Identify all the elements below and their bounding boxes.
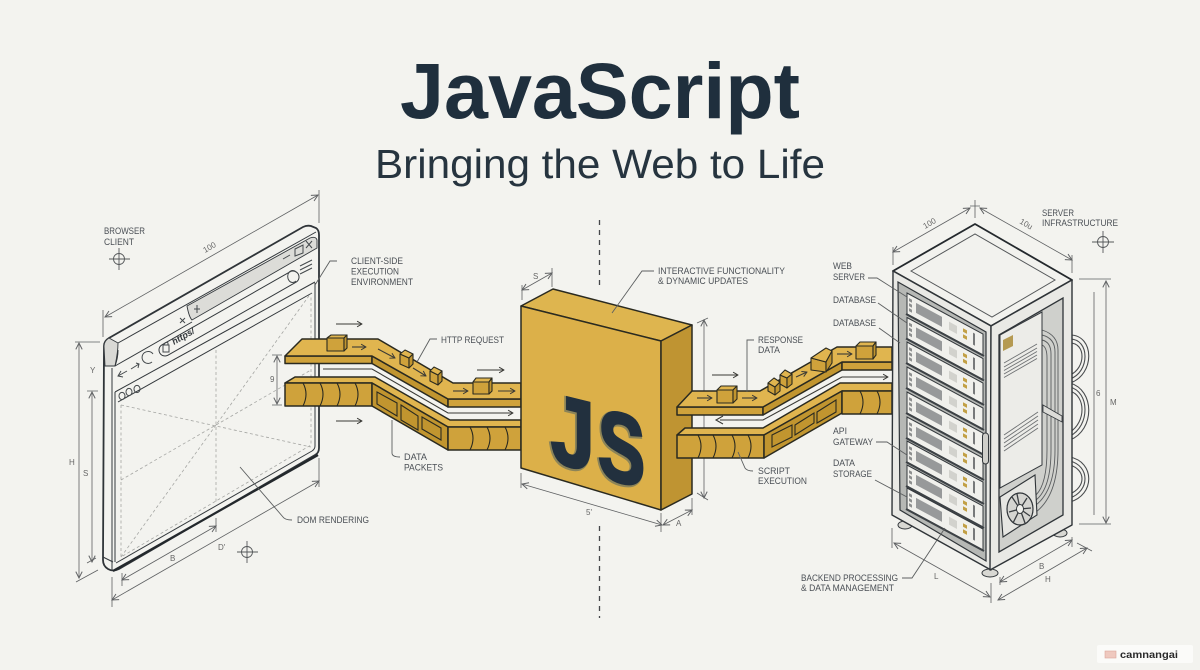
rack dimensions: B [1039,562,1044,571]
icon: crosshair top left [109,248,130,270]
label: backend processing [801,528,945,593]
panel: js cube [521,268,708,532]
label: browser client: BROWSER [104,226,145,236]
label: data storage [833,458,907,497]
label: http request: HTTP REQUEST [441,335,504,345]
js logo: S [598,389,645,509]
label: script execution [738,452,807,486]
cube dimensions: 5' [586,508,592,517]
label: backend processing: BACKEND PROCESSING [801,573,898,583]
label: interactive functionality: INTERACTIVE FUNCTIONALITY [658,266,785,276]
label: web server [833,261,907,297]
browser dimensions [69,190,319,607]
panel: server rack [892,200,1117,603]
label: data packets [392,420,443,472]
response arrow between tracks [323,369,513,413]
rack dimensions: 10u [1018,217,1034,231]
panel: browser client [69,190,319,607]
label: web server: WEB [833,261,852,271]
rack dimensions: 6 [1096,389,1101,398]
watermark badge: camnangai [1120,649,1178,661]
label: browser client [104,226,145,247]
label: server infrastructure [1042,208,1118,228]
cube dimensions: A [676,519,682,528]
label: api gateway [833,426,907,455]
door handle [982,433,988,464]
power supply fan [1000,475,1037,537]
panel: left data pipeline [270,324,521,450]
label: data storage: STORAGE [833,469,872,479]
lower packet track [285,377,521,450]
label: web server: SERVER [833,272,865,282]
browser dimensions: H [69,458,75,467]
rack dimensions: H [1045,575,1051,584]
label: client-side execution: EXECUTION [351,266,399,276]
rack dimensions: 100 [922,216,938,231]
label: database two: DATABASE [833,318,876,328]
url bar [165,277,293,350]
label: database one [833,295,907,323]
data packets [327,335,492,394]
server units [906,293,984,551]
external cable loops [1070,335,1089,502]
label: client-side execution: CLIENT-SIDE [351,256,403,266]
label: database two [833,318,900,343]
rack left face [892,271,991,570]
label: data packets: DATA [404,452,427,462]
cube top face [521,289,692,341]
label: api gateway: GATEWAY [833,437,873,447]
label: data packets: PACKETS [404,462,443,472]
label: database one: DATABASE [833,295,876,305]
label: client-side execution [315,256,413,287]
cube front face [521,306,661,510]
cube dimensions: S [533,272,538,281]
rack interior [999,298,1063,552]
upper request track [285,339,521,407]
label: backend processing: & DATA MANAGEMENT [801,583,894,593]
rack dimensions: L [934,572,939,581]
label: script execution: EXECUTION [758,476,807,486]
browser tab strip [187,237,317,320]
browser dimensions: D' [218,543,226,552]
flow arrows [336,324,515,421]
frame corner [104,338,118,366]
browser toolbar icons [118,241,312,400]
url text: https/ [170,325,198,347]
door panel [1000,312,1042,488]
track height dimension [270,355,282,405]
cube dimensions [521,268,708,532]
subtitle: Bringing the Web to Life [375,141,825,187]
rack right face [990,280,1072,570]
browser dimensions: B [170,554,175,563]
label: response data: DATA [758,345,780,355]
lower script track [677,383,892,458]
browser dimensions: Y [90,366,96,375]
track height dimension: 9 [270,375,275,384]
label: http request [417,335,504,362]
title: JavaScript [400,46,800,135]
browser window frame [103,226,319,570]
label: script execution: SCRIPT [758,466,790,476]
label: response data: RESPONSE [758,335,803,345]
rack dimensions [892,200,1117,603]
upper response track [677,347,892,415]
script arrow between tracks [716,377,888,424]
browser dimensions: 100 [202,240,218,255]
label: browser client: CLIENT [104,237,134,247]
label: server infrastructure: INFRASTRUCTURE [1042,218,1118,228]
label: interactive functionality [612,266,785,313]
label: server infrastructure: SERVER [1042,208,1074,218]
label: api gateway: API [833,426,847,436]
label: data storage: DATA [833,458,855,468]
rack dimensions: M [1110,398,1117,407]
js logo: J [550,375,594,495]
icon: crosshair bottom [237,541,258,563]
cube side face [661,325,692,510]
js logo: J [551,374,595,494]
center dashed axis [598,220,600,618]
label: dom rendering [240,467,369,525]
js logo [550,374,645,510]
response flow arrows [697,354,852,398]
viewport wireframe [121,293,311,557]
label: client-side execution: ENVIRONMENT [351,277,413,287]
response packets [717,342,876,403]
label: interactive functionality: & DYNAMIC UPDATES [658,276,748,286]
browser dimensions: S [83,469,88,478]
label: dom rendering: DOM RENDERING [297,515,369,525]
panel: right data pipeline [677,342,892,458]
rack feet [898,521,1067,577]
label: response data [747,335,803,392]
js logo: S [597,390,644,510]
rack top [893,224,1072,326]
watermark badge [1097,645,1193,663]
internal cables [1036,330,1058,512]
icon: crosshair right [1092,231,1114,253]
